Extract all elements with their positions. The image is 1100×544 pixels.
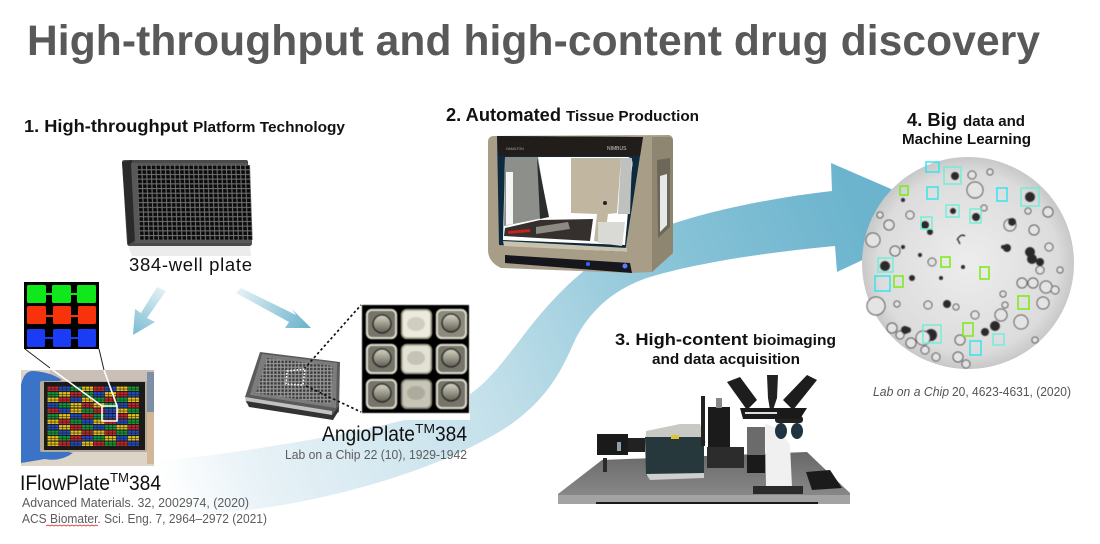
- detection boxes: [875, 162, 1039, 355]
- big curved arrow: [155, 163, 905, 515]
- label: IFlowPlate: IFlowPlate: [20, 472, 110, 495]
- panel: cell culture image: [862, 157, 1074, 369]
- heading 4: [902, 110, 1031, 148]
- label: IFlowPlate: TM: [110, 470, 129, 485]
- panel: AngioPlate: [245, 303, 470, 420]
- reference: cell image: Lab on a Chip: [873, 385, 949, 399]
- spheroids: [866, 169, 1063, 368]
- reference: AngioPlate: Lab on a Chip 22 (10), 1929-1942: [285, 448, 467, 462]
- label: 384-well plate: 384-well plate: [129, 254, 252, 275]
- icon: tissue production robot: NIMBUS: [607, 146, 627, 152]
- laser unit: [645, 424, 706, 445]
- reference: cell image: [873, 385, 1071, 399]
- heading 2: [446, 105, 699, 125]
- icon: 384-well plate: [122, 160, 253, 256]
- references: IFlowPlate: ACS Biomater. Sci. Eng. 7, 2964–2972 (2021): [22, 512, 267, 526]
- heading 1: [24, 116, 345, 136]
- heading 4: 4. Big: [907, 110, 957, 130]
- heading 4: data and: [963, 114, 1025, 130]
- title: High-throughput and high-content drug discovery: [27, 18, 1040, 65]
- panel: IFlowPlate: [21, 282, 154, 466]
- heading 3: bioimaging: [753, 333, 836, 349]
- plate photo: [21, 370, 154, 466]
- zoom callout lines: [25, 349, 104, 370]
- references: IFlowPlate: Advanced Materials. 32, 2002974, (2020): [22, 496, 249, 510]
- heading 3: 3. High-content: [615, 331, 749, 349]
- heading 4: Machine Learning: [902, 131, 1031, 148]
- label: AngioPlate: TM: [415, 421, 435, 436]
- nine-well micrograph: [362, 305, 469, 413]
- reference: cell image: 20, 4623-4631, (2020): [952, 385, 1071, 399]
- microscope body: [747, 427, 765, 455]
- label: AngioPlate: 384: [435, 423, 467, 446]
- icon: tissue production robot: [488, 135, 673, 273]
- heading 1: 1. High-throughput: [24, 116, 188, 136]
- label: AngioPlate: AngioPlate: [322, 423, 415, 446]
- camera: [597, 434, 628, 455]
- arrow to AngioPlate: [236, 288, 311, 328]
- label: AngioPlate: [322, 421, 467, 446]
- dotted zoom lines: [304, 305, 361, 412]
- icon: bioimaging microscope: [558, 375, 850, 504]
- references: IFlowPlate: [22, 496, 267, 526]
- dotted selection: [286, 369, 305, 385]
- heading 1: Platform Technology: [193, 120, 345, 136]
- upper optics arms: [727, 375, 817, 419]
- small plate: [245, 352, 340, 420]
- heading 2: Tissue Production: [566, 109, 699, 125]
- heading 3: [615, 331, 836, 368]
- selection box: [50, 368, 117, 421]
- label: IFlowPlate: 384: [129, 472, 161, 495]
- icon: tissue production robot: HAMILTON: [506, 147, 524, 151]
- heading 2: 2. Automated: [446, 105, 561, 125]
- side stage: [806, 470, 842, 490]
- label: IFlowPlate: [20, 470, 161, 495]
- inset: coloured channels: [24, 282, 99, 349]
- vertical housing: [708, 407, 730, 447]
- arrow to IFlowPlate: [133, 287, 166, 335]
- heading 3: and data acquisition: [652, 352, 800, 368]
- white image card: [352, 303, 470, 420]
